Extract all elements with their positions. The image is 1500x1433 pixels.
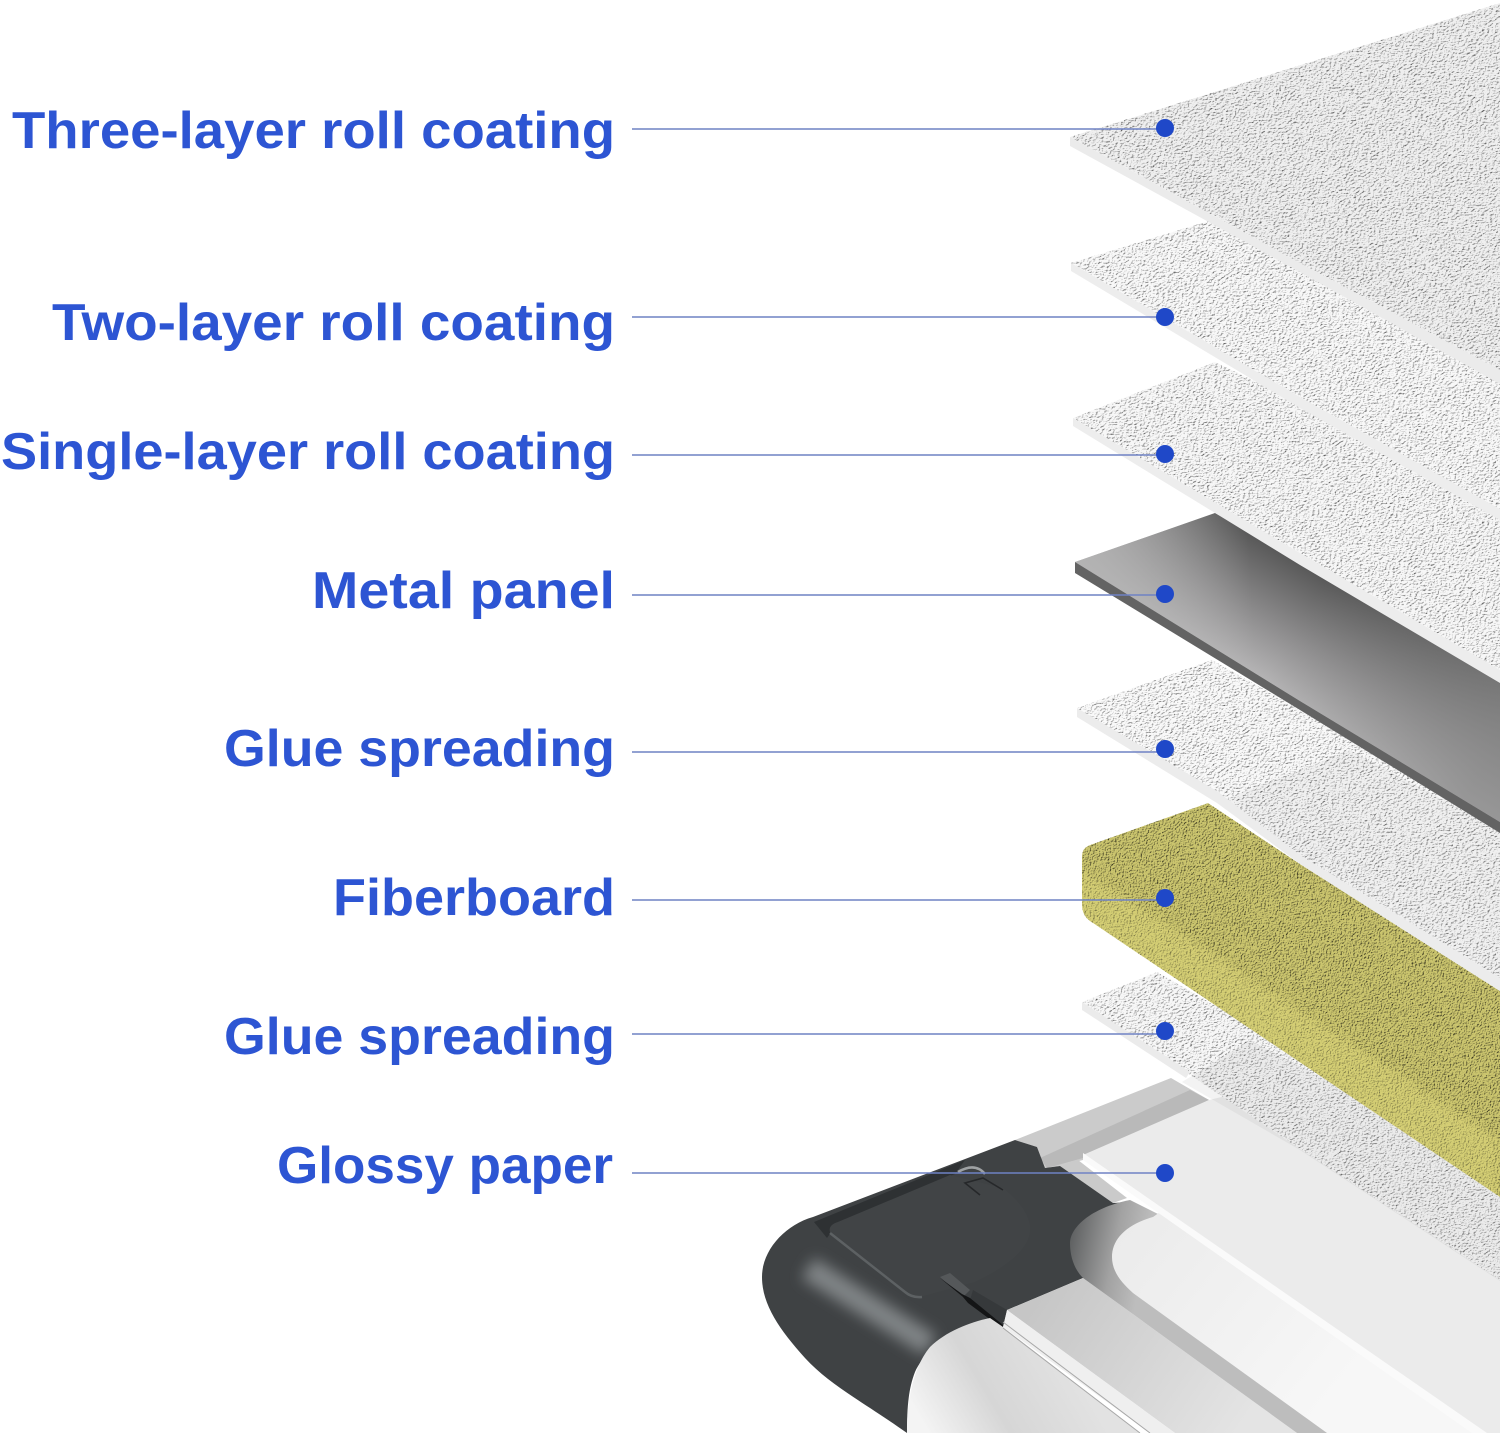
grey channel panel [1007,1278,1297,1433]
label: glue spreading upper [224,720,1174,778]
label: glue spreading lower [224,1008,1174,1066]
bottom silver rail [907,1318,1140,1433]
label: single-layer roll coating [1,423,1174,481]
layer: three-layer roll coating [1070,3,1500,384]
label: glossy paper [277,1137,1174,1195]
latch glint [958,1167,985,1174]
label: glossy paper: Glossy paper [277,1137,613,1195]
thin metal strip [1003,1310,1175,1433]
layer: lower glue spreading [1082,972,1500,1281]
cap latch cover [830,1175,1030,1297]
white channel face [1112,1205,1480,1433]
label: metal panel: Metal panel [312,562,615,620]
fiberboard bevel light [1075,870,1500,1210]
layer: two-layer roll coating [1071,220,1500,520]
layer: single-layer roll coating [1073,362,1500,683]
label: glue spreading lower: Glue spreading [224,1008,615,1066]
label: three-layer roll coating [12,102,1174,160]
inner rounded channel [1070,1200,1340,1433]
label: single-layer roll coating: Single-layer roll coating [1,423,615,481]
cap highlight [808,1268,930,1345]
layer: fiberboard [1075,803,1500,1210]
top silver rail [1015,1078,1209,1203]
layer: metal panel [1075,513,1500,833]
label: two-layer roll coating: Two-layer roll coating [52,294,615,352]
label: two-layer roll coating [52,294,1174,352]
latch key mark [965,1178,1003,1195]
label: three-layer roll coating: Three-layer roll coating [12,102,615,160]
label: glue spreading upper: Glue spreading [224,720,615,778]
label: fiberboard: Fiberboard [333,869,615,927]
layer: upper glue spreading [1077,660,1500,991]
latch slots [940,1273,1007,1329]
frame corner and rails [762,1078,1362,1433]
latch lower edge highlight [830,1233,922,1297]
label: fiberboard [333,869,1174,927]
label: metal panel [312,562,1174,620]
cap groove shadow [814,1160,965,1238]
layer: glossy paper [1083,1095,1500,1433]
dark corner cap [762,1140,1130,1433]
